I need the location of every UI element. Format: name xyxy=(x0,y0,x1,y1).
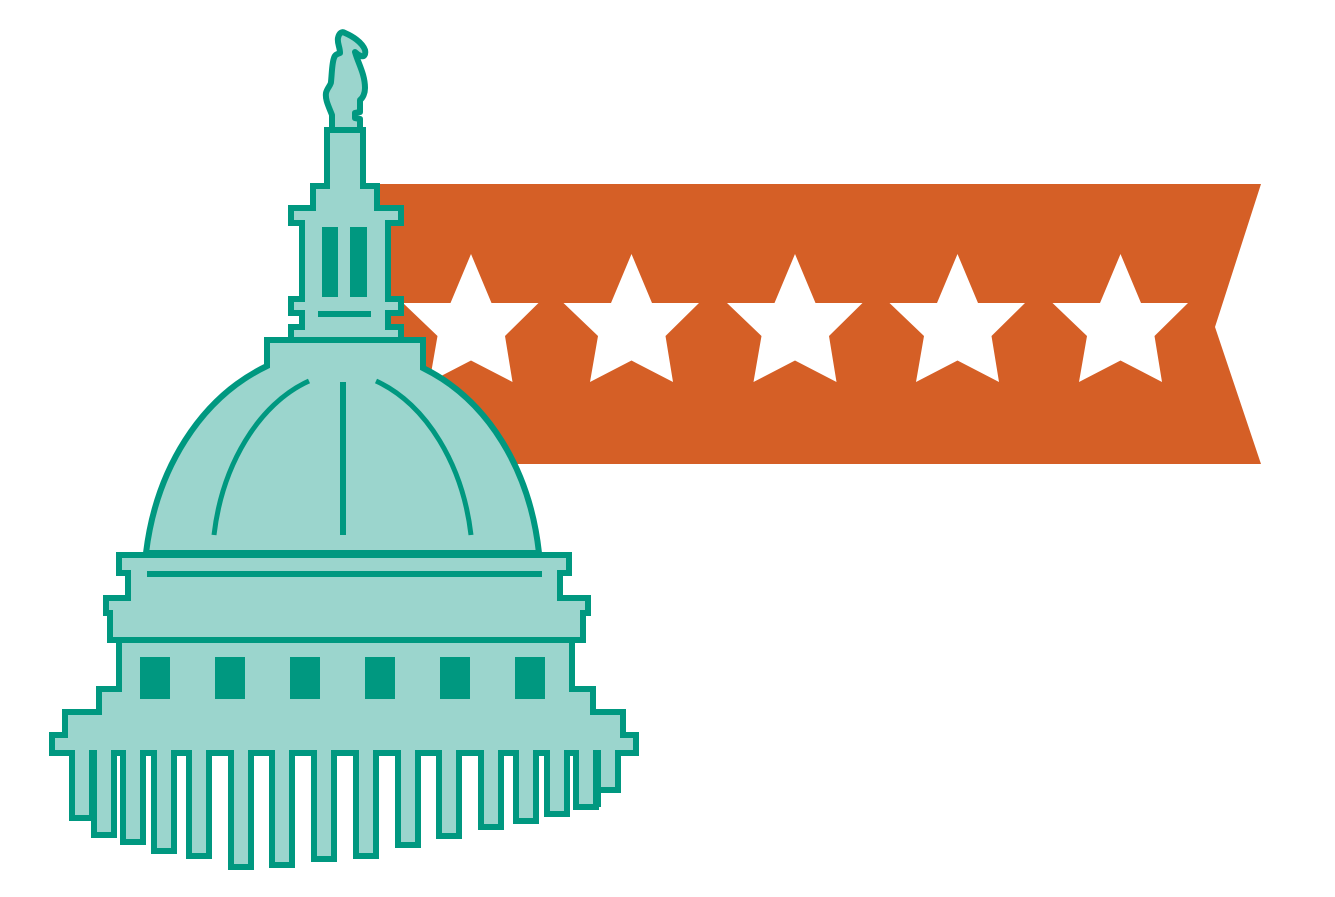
star 1 xyxy=(403,254,538,382)
window 1 xyxy=(140,657,170,699)
window 4 xyxy=(365,657,395,699)
ribbon shape xyxy=(360,184,1261,464)
left rib xyxy=(214,381,309,535)
lantern ledge line xyxy=(318,311,371,317)
left doubled wall xyxy=(89,750,97,818)
dome ribs xyxy=(214,381,471,535)
upper drum xyxy=(106,555,588,640)
window 2 xyxy=(215,657,245,699)
doubled column walls xyxy=(89,750,601,818)
banner: orange ribbon with stars xyxy=(360,184,1261,464)
star 2 xyxy=(564,254,699,382)
right rib xyxy=(376,381,471,535)
star 4 xyxy=(890,254,1025,382)
dome xyxy=(146,340,539,553)
cornice line xyxy=(147,571,542,577)
window 6 xyxy=(515,657,545,699)
five white stars xyxy=(403,254,1188,382)
star 3 xyxy=(727,254,862,382)
icon: capitol building xyxy=(52,32,636,867)
statue on top of the dome xyxy=(326,32,365,130)
lantern tower xyxy=(291,130,401,342)
right doubled wall xyxy=(593,750,601,807)
colonnade base and columns xyxy=(52,640,636,867)
star 5 xyxy=(1052,254,1188,382)
window 3 xyxy=(290,657,320,699)
windows row xyxy=(140,657,545,699)
lantern windows xyxy=(318,227,371,317)
left lantern window xyxy=(322,227,338,297)
center rib xyxy=(340,382,346,535)
window 5 xyxy=(440,657,470,699)
right lantern window xyxy=(350,227,367,297)
